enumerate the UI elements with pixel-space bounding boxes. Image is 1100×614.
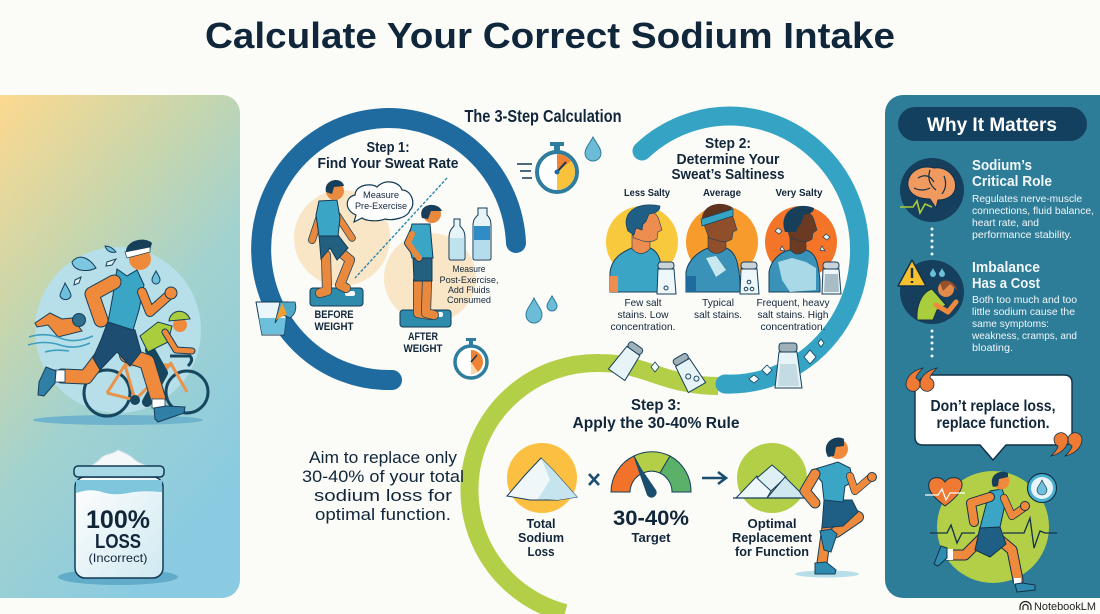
text: imbalance has a cost: Has a Cost [972,275,1040,292]
text: 30-40% target [613,507,689,545]
heading: step 2: Determine Your [676,151,780,168]
text: imbalance has a cost: Imbalance [972,259,1040,276]
text: measure post-exercise: Consumed [447,295,491,306]
column: less salty: Less Salty [624,187,670,199]
panel: step 1 [256,139,498,378]
text: aim to replace: optimal function. [315,505,451,524]
text: measure post-exercise [440,264,498,306]
icon: quote marks [906,368,1082,456]
text: after weight: AFTER [408,331,438,343]
icon: sweat drop top [585,137,601,161]
column: very salty: Frequent, heavy [756,297,830,309]
icon: shaker medium [740,262,759,294]
icon: stopwatch small [455,338,487,378]
column: less salty: concentration. [610,321,676,333]
text: imbalance has a cost: Both too much and too [972,294,1077,306]
text: aim to replace [302,448,464,524]
heading: step 2: Step 2: [705,135,751,152]
text: 100% loss label: 100% [86,506,150,534]
text: imbalance has a cost: bloating. [972,342,1013,354]
text: sodium's critical role: Critical Role [972,173,1052,190]
panel: step 2 [606,135,841,333]
callout: measure pre-exercise: Pre-Exercise [355,201,407,212]
text: imbalance has a cost: little sodium cause the [972,306,1075,318]
text: sodium's critical role: connections, fluid balance, [972,205,1094,217]
arc: step 3 green [469,363,718,613]
symbol: multiply [589,474,599,485]
text: before weight [314,309,354,333]
callout: don't replace loss [906,368,1082,460]
arc: step 1 blue [261,118,516,380]
icon: shaker light [657,262,676,294]
heading: step 2: Sweat’s Saltiness [672,166,784,183]
column: very salty: salt stains. High [758,309,829,321]
figure: runner step 3 [795,438,876,578]
text: total sodium loss: Total [526,516,556,531]
icon: shaker heavy [822,262,841,294]
text: imbalance has a cost [971,259,1077,354]
text: optimal replacement [732,516,813,559]
text: imbalance has a cost: weakness, cramps, and [971,330,1077,342]
text: aim to replace: Aim to replace only [309,448,457,467]
heading: step 1: Find Your Sweat Rate [318,155,458,172]
text: aim to replace: sodium loss for [314,486,452,505]
heading: why it matters [898,107,1087,141]
column: very salty: Very Salty [776,187,823,199]
icons: falling salt shakers [608,339,824,393]
heading: step 3: Step 3: [631,397,681,414]
column: average [686,187,759,321]
column: less salty: Few salt [624,297,662,309]
dotted connector 1 [930,228,934,256]
illustration: triathlon athletes [28,240,208,425]
text: 30-40% target: 30-40% [613,507,689,530]
heading: step 3: Apply the 30-40% Rule [572,415,740,432]
heading: the 3-step calculation: The 3-Step Calculation [464,106,622,126]
text: 30-40% target: Target [632,530,671,545]
panel: step 3 [507,397,876,578]
text: aim to replace: 30-40% of your total [302,467,464,486]
column: average: salt stains. [694,309,742,321]
column: average: Typical [702,297,734,309]
heading: step 1: Step 1: [366,139,410,156]
figure: runner with heart and hydration [925,471,1057,592]
chart: gauge 30-40% target [611,452,691,498]
heading: step 3 [572,397,740,432]
column: very salty [756,187,841,333]
text: after weight [404,331,443,355]
dashed divider [355,178,447,278]
dotted connector 2 [930,330,934,358]
text: total sodium loss: Loss [528,544,554,559]
figure: before weight on scale [310,180,363,306]
column: very salty: concentration. [760,321,826,333]
icon: measuring cup [256,302,296,335]
icon: optimal replacement salt piles [733,443,808,513]
text: after weight: WEIGHT [404,343,443,355]
panel: left athlete panel [0,95,240,598]
text: total sodium loss [518,516,564,559]
text: sodium's critical role: heart rate, and [972,217,1039,229]
text: sodium's critical role [972,157,1094,241]
callout: don't replace loss: Don’t replace loss, [930,398,1056,415]
footer: NotebookLM badge: NotebookLM [1034,601,1096,613]
column: less salty [606,187,678,333]
icon: warning and unwell person [898,260,964,324]
column: average: Average [703,187,741,199]
text: sodium's critical role: Regulates nerve-muscle [972,193,1082,205]
text: 100% loss label: LOSS [95,531,141,553]
text: before weight: WEIGHT [314,321,354,333]
text: optimal replacement: for Function [735,544,809,559]
text: measure post-exercise: Post-Exercise, [440,275,498,286]
text: optimal replacement: Replacement [732,530,813,545]
text: measure post-exercise: Measure [452,264,486,275]
text: total sodium loss: Sodium [518,530,564,545]
callout: don't replace loss: replace function. [936,415,1050,432]
icon: salt jar 100% loss [58,450,178,585]
icon: total sodium loss salt pile [507,443,577,513]
column: less salty: stains. Low [618,309,669,321]
icon: water bottles [449,208,491,260]
text: before weight: BEFORE [314,309,354,321]
text: imbalance has a cost: same symptoms: [972,318,1049,330]
text: sodium's critical role: Sodium’s [972,157,1032,174]
arrow [702,472,726,484]
text: 100% loss label: (Incorrect) [88,551,148,565]
panel: why it matters [885,95,1100,598]
figure: after weight on scale [400,205,451,327]
icon: stopwatch with speed lines [517,142,577,192]
heading: why it matters: Why It Matters [927,115,1057,136]
heading: step 2 [672,135,784,183]
heading: step 1 [318,139,458,172]
title: Calculate Your Correct Sodium Intake [205,15,895,56]
icon: brain [900,158,964,222]
callout: measure pre-exercise [347,182,413,222]
text: measure post-exercise: Add Fluids [448,285,490,296]
callout: measure pre-exercise: Measure [363,190,399,201]
text: 100% loss label [86,506,150,565]
arc: step 2 teal [642,116,860,384]
icon: sweat drops middle [526,296,557,323]
text: sodium's critical role: performance stability. [972,229,1072,241]
text: optimal replacement: Optimal [748,516,796,531]
